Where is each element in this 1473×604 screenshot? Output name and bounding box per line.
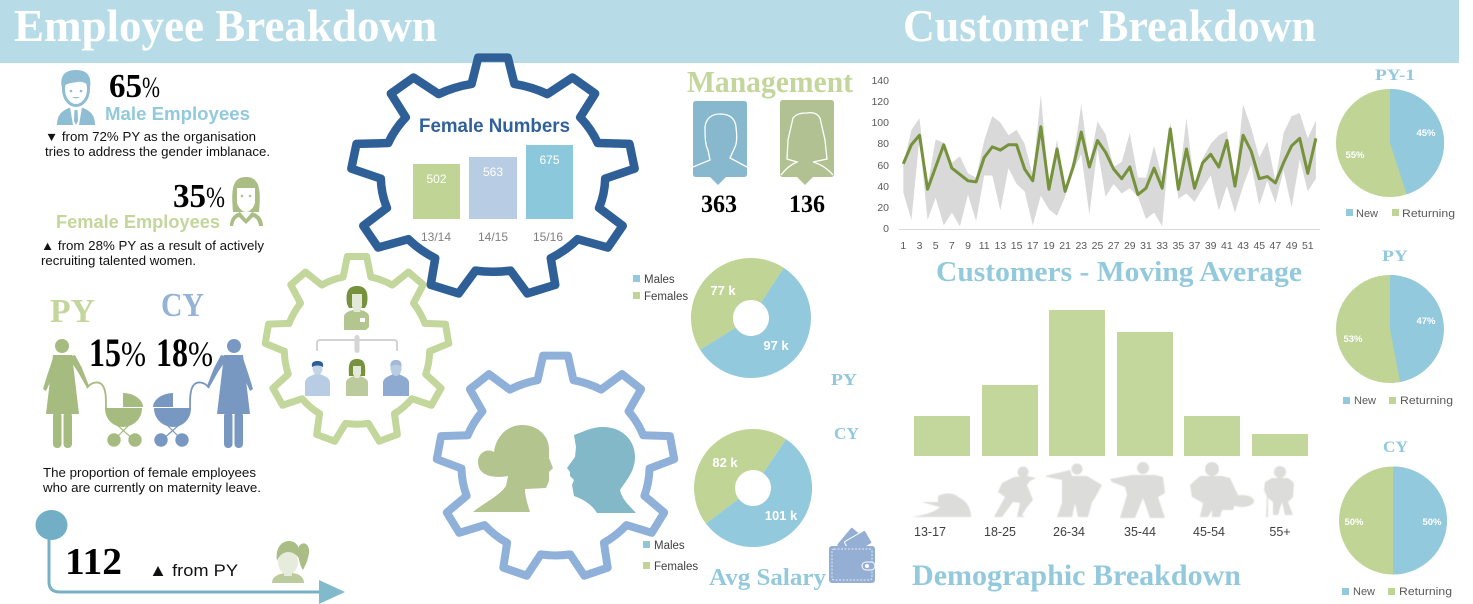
note: up from PY: ▲ from PY xyxy=(149,561,238,580)
icon: manager woman xyxy=(344,286,369,330)
legend: salary PY: Females xyxy=(644,291,688,303)
stat: 363: 363 xyxy=(701,191,737,218)
note: female trend xyxy=(41,239,265,268)
stat: 65%: 65 xyxy=(109,68,142,105)
legend: PY-1 xyxy=(1346,208,1455,220)
label: male employees: Male Employees xyxy=(105,104,250,124)
donut chart: salary PY: 77 k xyxy=(710,283,736,298)
legend: salary CY: Males xyxy=(654,540,685,552)
note: female trend: ▲ from 28% PY as a result of actively xyxy=(41,239,265,253)
note: male trend xyxy=(45,130,270,159)
chart: y axis labels: 40 xyxy=(877,181,889,193)
pie chart: PY: 47% xyxy=(1416,316,1436,327)
panel: pie PY xyxy=(1336,248,1453,407)
chart: x axis labels: 13 xyxy=(995,240,1006,252)
legend: PY: New xyxy=(1354,395,1376,407)
panel: pie PY-1 xyxy=(1336,67,1455,220)
chart: x axis labels: 27 xyxy=(1108,240,1120,252)
stat: 112: 112 xyxy=(65,541,122,583)
donut chart: salary CY xyxy=(694,429,812,547)
pie chart: PY xyxy=(1336,275,1444,383)
chart: x axis labels: 49 xyxy=(1286,240,1298,252)
chart: x axis labels: 5 xyxy=(933,240,939,252)
heading: avg salary: Avg Salary xyxy=(709,565,826,591)
icon: staff man right xyxy=(383,360,409,396)
gear: female numbers xyxy=(351,58,635,293)
stat: 35%: % xyxy=(206,181,225,214)
heading: customers moving average: Customers - Moving Average xyxy=(936,256,1302,288)
note: male trend: ▼ from 72% PY as the organisation xyxy=(45,130,256,144)
legend: PY-1: New xyxy=(1356,208,1378,220)
pie chart: CY: 50% xyxy=(1344,517,1364,528)
chart: x axis labels: 39 xyxy=(1205,240,1217,252)
chart: y axis labels: 60 xyxy=(877,160,889,172)
labels: age groups: 55+ xyxy=(1269,525,1291,539)
legend: CY xyxy=(1342,586,1452,598)
bar chart: female numbers: 675 xyxy=(539,153,560,167)
chart: x axis labels: 23 xyxy=(1075,240,1087,252)
bar chart: female numbers xyxy=(413,145,573,244)
stat: 35% xyxy=(173,178,225,215)
heading: CY: CY xyxy=(1383,439,1408,456)
gear: salary comparison xyxy=(437,356,674,576)
heading: demographic breakdown: Demographic Breakdown xyxy=(912,559,1241,592)
pie chart: CY xyxy=(1339,466,1447,574)
note: maternity leave xyxy=(42,466,261,495)
chart: y axis labels: 20 xyxy=(877,202,889,214)
note: maternity leave: who are currently on maternity leave. xyxy=(42,481,261,495)
icon: org chart connector xyxy=(317,335,397,353)
title: employee breakdown: Employee Breakdown xyxy=(14,0,437,51)
labels: age groups xyxy=(914,525,1291,539)
bar chart: female numbers: 13/14 xyxy=(421,230,451,244)
heading: CY: CY xyxy=(161,287,204,324)
icon: staff man left xyxy=(305,361,330,396)
chart: x axis labels: 41 xyxy=(1221,240,1233,252)
chart: x axis labels: 37 xyxy=(1189,240,1200,252)
legend: PY: Returning xyxy=(1400,395,1453,407)
stat: 65% xyxy=(109,68,160,105)
icons: age group silhouettes xyxy=(912,462,1294,518)
chart: x axis labels: 3 xyxy=(917,240,923,252)
bar chart: female numbers: 15/16 xyxy=(533,230,563,244)
pie chart: PY-1: 45% xyxy=(1416,128,1436,139)
chart: x axis labels: 11 xyxy=(979,240,990,252)
bar chart: female numbers: 502 xyxy=(426,172,447,186)
chart: x axis labels: 31 xyxy=(1140,240,1152,252)
legend: salary CY: Females xyxy=(654,561,698,573)
heading: management: Management xyxy=(687,64,854,99)
bar chart: female numbers: 14/15 xyxy=(478,230,508,244)
chart: x axis labels: 15 xyxy=(1011,240,1023,252)
labels: age groups: 26-34 xyxy=(1053,525,1085,539)
stat: 15%: 15 xyxy=(89,330,121,375)
heading: PY: PY xyxy=(1382,248,1409,265)
pie chart: PY-1: 55% xyxy=(1345,150,1365,161)
bar chart: demographic breakdown xyxy=(914,310,1308,456)
card: female management xyxy=(780,100,834,185)
note: maternity leave: The proportion of female employees xyxy=(43,466,256,480)
panel: pie CY xyxy=(1339,439,1452,598)
labels: age groups: 35-44 xyxy=(1124,525,1156,539)
legend: PY-1: Returning xyxy=(1402,208,1455,220)
legend: salary CY xyxy=(643,540,698,573)
chart: x axis labels: 7 xyxy=(949,240,955,252)
legend: salary PY: Males xyxy=(644,274,675,286)
stat: 136: 136 xyxy=(789,191,825,218)
label: CY: CY xyxy=(834,424,859,443)
icon: mother and pram, PY xyxy=(43,339,143,448)
icon: wallet xyxy=(829,527,875,583)
donut chart: salary CY: 82 k xyxy=(712,455,738,470)
gear: organisation xyxy=(265,257,449,441)
stat: 65%: % xyxy=(142,71,160,104)
stat: 35%: 35 xyxy=(173,178,206,215)
header band xyxy=(0,0,1459,63)
line chart: customers moving average xyxy=(871,75,1320,252)
chart: y axis labels: 0 xyxy=(883,223,889,235)
chart: x axis labels: 25 xyxy=(1092,240,1103,252)
chart: x axis labels xyxy=(900,240,1314,252)
pie chart: CY: 50% xyxy=(1422,517,1442,528)
heading: PY: PY xyxy=(50,293,95,330)
label: PY: PY xyxy=(831,370,857,389)
panel: male employees xyxy=(45,68,270,159)
chart: x axis labels: 19 xyxy=(1043,240,1055,252)
panel: maternity leave xyxy=(42,287,261,495)
legend: CY: New xyxy=(1353,586,1375,598)
chart: x axis labels: 51 xyxy=(1302,240,1314,252)
icon: male employee xyxy=(57,70,95,125)
icon: female silhouette xyxy=(473,425,553,512)
heading: female numbers: Female Numbers xyxy=(419,116,570,137)
note: male trend: tries to address the gender imblanace. xyxy=(45,145,270,159)
arrow: timeline xyxy=(36,510,345,604)
chart: x axis labels: 1 xyxy=(900,240,906,252)
icon: woman with ponytail xyxy=(272,541,309,583)
icon: staff woman centre xyxy=(346,359,368,396)
chart: y axis labels: 100 xyxy=(871,117,889,129)
stat: 15%: % xyxy=(121,334,146,374)
chart: x axis labels: 29 xyxy=(1124,240,1136,252)
stat: 18%: 18 xyxy=(156,330,188,375)
donut chart: salary PY: 97 k xyxy=(763,338,789,353)
title: customer breakdown: Customer Breakdown xyxy=(903,0,1316,51)
labels: age groups: 45-54 xyxy=(1193,525,1225,539)
chart: x axis labels: 9 xyxy=(965,240,971,252)
chart: min-max band xyxy=(903,95,1316,226)
pie chart: PY-1 xyxy=(1336,89,1444,197)
labels: age groups: 13-17 xyxy=(914,525,946,539)
heading: PY-1: PY-1 xyxy=(1375,67,1415,84)
chart: x axis labels: 47 xyxy=(1270,240,1281,252)
legend: salary PY xyxy=(633,274,688,303)
icon: male silhouette xyxy=(567,427,636,513)
panel: female employees xyxy=(41,177,265,268)
label: female employees: Female Employees xyxy=(56,212,220,232)
donut chart: salary CY: 101 k xyxy=(765,508,798,523)
legend: PY xyxy=(1343,395,1453,407)
chart: y axis labels: 120 xyxy=(871,96,889,108)
chart: moving average line xyxy=(903,127,1316,195)
chart: x axis labels: 43 xyxy=(1237,240,1249,252)
donut chart: salary PY xyxy=(691,258,811,378)
chart: x axis labels: 35 xyxy=(1173,240,1184,252)
chart: x axis labels: 17 xyxy=(1027,240,1039,252)
chart: x axis labels: 33 xyxy=(1156,240,1168,252)
chart: y axis labels xyxy=(871,75,889,235)
stat: 18%: % xyxy=(188,334,213,374)
note: female trend: recruiting talented women. xyxy=(41,254,196,268)
icon: female employee xyxy=(230,177,263,226)
chart: x axis labels: 45 xyxy=(1253,240,1265,252)
card: male management xyxy=(693,101,747,185)
chart: x axis labels: 21 xyxy=(1059,240,1071,252)
chart: y axis labels: 140 xyxy=(871,75,889,87)
legend: CY: Returning xyxy=(1399,586,1452,598)
pie chart: PY: 53% xyxy=(1343,334,1363,345)
bar chart: female numbers: 563 xyxy=(483,165,503,179)
icon: mother and pram, CY xyxy=(153,339,253,448)
labels: age groups: 18-25 xyxy=(984,525,1016,539)
chart: y axis labels: 80 xyxy=(877,138,889,150)
